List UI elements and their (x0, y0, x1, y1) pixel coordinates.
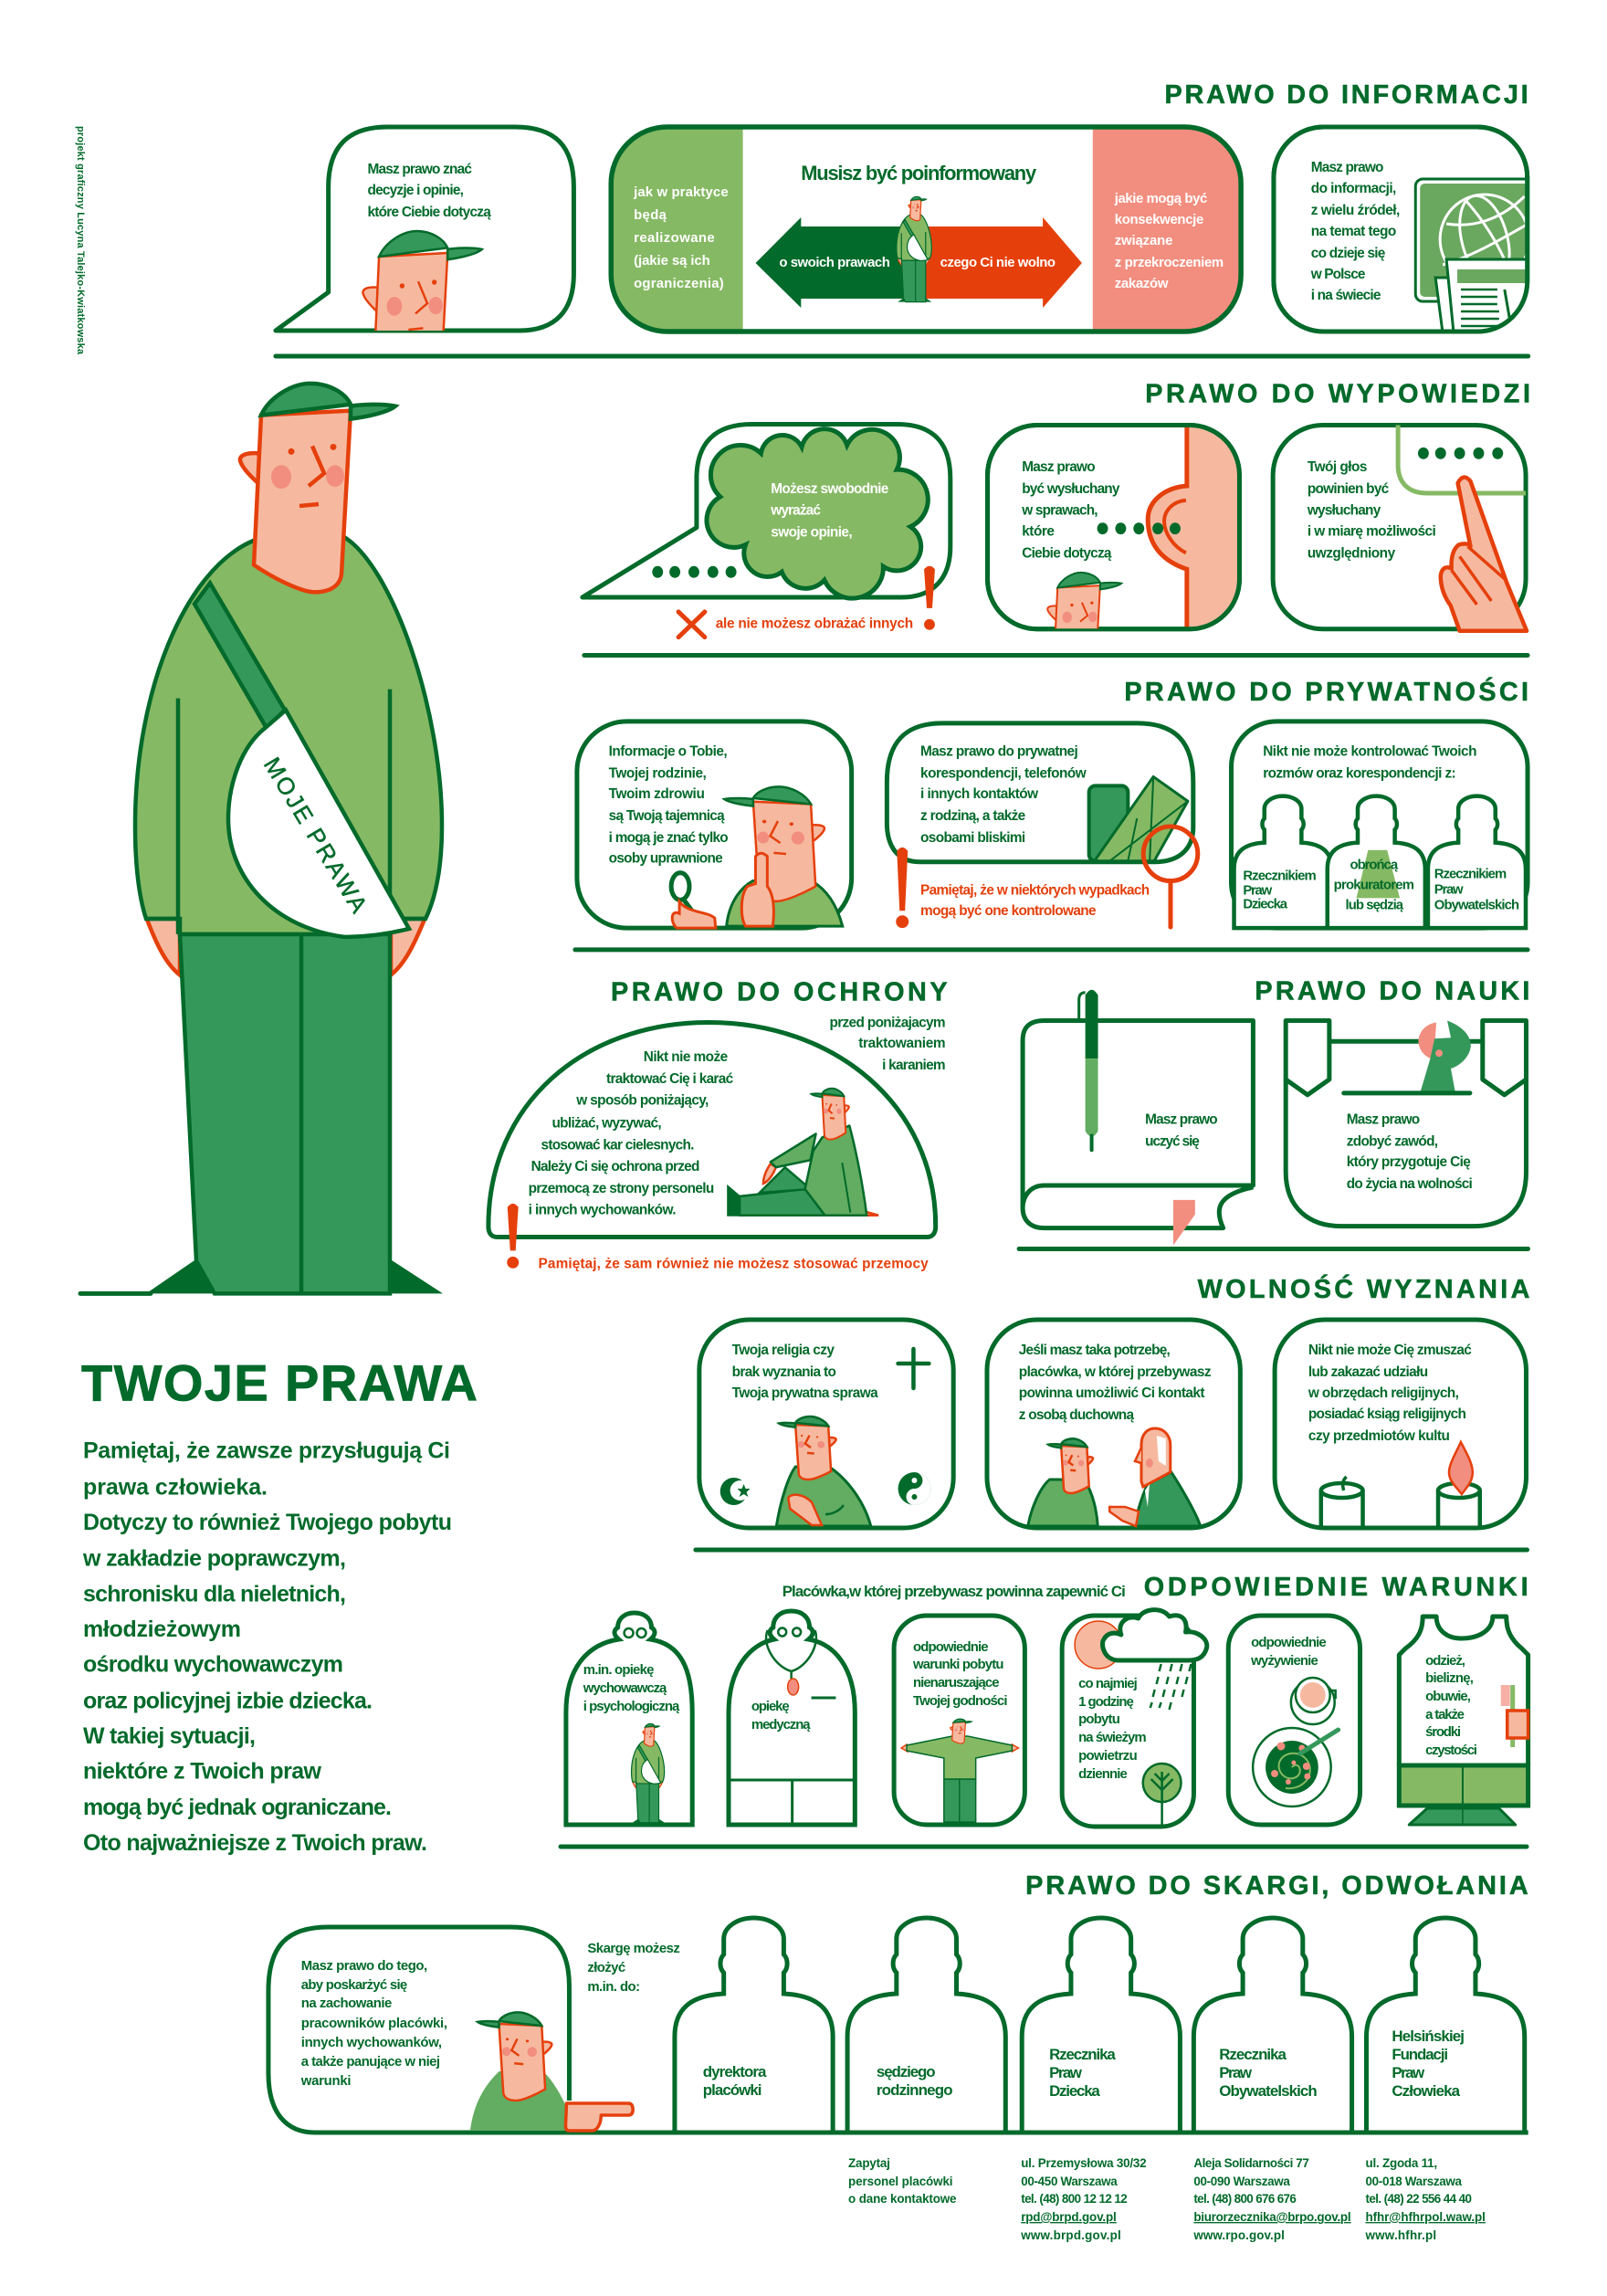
heading: ODPOWIEDNIE WARUNKI (1144, 1573, 1528, 1602)
panel: musisz być poinformowany: jak w praktyce (633, 184, 729, 200)
contact: HFPC (1365, 2156, 1486, 2242)
intro paragraph: prawa człowieka. (83, 1474, 268, 1500)
icon: cloud (1103, 1610, 1207, 1660)
panel: musisz być poinformowany: jakie mogą być (1114, 191, 1207, 206)
panel: korespondencja (887, 723, 1198, 928)
panel: musisz być poinformowany: związane (1115, 233, 1172, 248)
icon: tree (1143, 1764, 1182, 1825)
sections: ochrona i nauka (488, 977, 1529, 1271)
panel: wyżywienie: odpowiednie (1251, 1635, 1327, 1650)
panel: warunki pobytu: Twojej godności (913, 1693, 1007, 1709)
panel: ear: w sprawach, (1021, 503, 1098, 519)
bag label: MOJE PRAWA (258, 753, 372, 918)
contact: personel: Zapytaj (848, 2156, 890, 2170)
panel: korespondencja: korespondencji, telefonów (920, 765, 1087, 781)
panel: odzież (tank top): czystości (1425, 1743, 1477, 1758)
panel: obrzędy religijne (1275, 1320, 1526, 1528)
warning: korespondencja: Pamiętaj, że w niektórych wypadkach (920, 882, 1150, 898)
panel: twoja tajemnica: osoby uprawnione (609, 851, 723, 867)
text: skargę możesz złożyć: Skargę możesz (587, 1941, 680, 1956)
panel: dome: przemocą ze strony personelu (529, 1181, 714, 1196)
panel: do informacji z wielu źródeł: w Polsce (1310, 267, 1366, 282)
panel: obrzędy religijne: posiadać ksiąg religijnych (1308, 1406, 1466, 1422)
contact: RPD (1020, 2156, 1147, 2242)
icon: cross (898, 1349, 929, 1388)
contact: RPO: biurorzecznika@brpo.gov.pl (1193, 2210, 1351, 2224)
icon: envelope (1095, 776, 1188, 861)
icon: pen (1079, 990, 1098, 1150)
icon: yin yang (898, 1472, 930, 1505)
panel: odzież (tank top): środki (1425, 1724, 1461, 1740)
panel: musisz być poinformowany: konsekwencje (1115, 212, 1203, 227)
intro paragraph: schronisku dla nieletnich, (83, 1581, 346, 1606)
panel: nikt nie może kontrolować: Obywatelskich (1434, 898, 1519, 912)
icon: thought cloud (707, 429, 928, 598)
panel: musisz być poinformowany (611, 127, 1241, 332)
panel: nikt nie może kontrolować: Praw (1434, 882, 1464, 897)
icon: book (1023, 990, 1253, 1245)
bust: rzecznik praw obywatelskich (1193, 1918, 1352, 2133)
panel: dome: Należy Ci się ochrona przed (531, 1159, 699, 1174)
panel: prawo do skargi: aby poskarżyć się (301, 1977, 407, 1993)
panel: dome (488, 1022, 936, 1238)
panel: świeże powietrze: 1 godzinę (1078, 1694, 1134, 1710)
panel: musisz być poinformowany: z przekroczeniem (1115, 255, 1224, 270)
contact: personel: personel placówki (848, 2175, 953, 2188)
panel: dome: traktować Cię i karać (606, 1071, 734, 1087)
intro paragraph: w zakładzie poprawczym, (82, 1546, 346, 1572)
panel: nikt nie może kontrolować: lub sędzią (1346, 898, 1404, 912)
arrow: czego Ci nie wolno (921, 217, 1082, 308)
contact: RPD: www.brpd.gov.pl (1020, 2228, 1121, 2242)
figure: man with finger to lips (724, 786, 843, 926)
text: przed poniżającym traktowaniem: i karaniem (882, 1058, 946, 1073)
panel: speech bubble: decyzje i opinie, (367, 183, 464, 198)
panel: musisz być poinformowany: czego Ci nie wolno (940, 255, 1056, 270)
icon: machine (1344, 1020, 1471, 1093)
bust: sędzia rodzinny (847, 1918, 1005, 2133)
panel: speech bubble (273, 124, 576, 332)
bust: rzecznik praw dziecka: Rzecznika (1049, 2046, 1116, 2063)
figure: man with arms out (901, 1719, 1018, 1822)
intro paragraph: ośrodku wychowawczym (83, 1652, 343, 1678)
icon: toothbrush in hand (1501, 1685, 1528, 1747)
panel: osoba duchowna: placówka, w której przebywasz (1019, 1364, 1212, 1380)
panel: nikt nie może kontrolować: Rzecznikiem (1243, 869, 1317, 884)
sections: wypowiedź i prywatność (575, 380, 1531, 950)
panel: opieka medyczna: medyczną (751, 1717, 811, 1733)
panel: dome: i innych wychowanków. (529, 1203, 677, 1218)
panel: opieka wychowawcza: i psychologiczną (583, 1699, 680, 1714)
bust: helsińska fundacja (1367, 1918, 1525, 2133)
icon: stethoscope (766, 1627, 816, 1695)
panel: twoja tajemnica: są Twoją tajemnicą (609, 808, 725, 824)
text: przed poniżającym traktowaniem (829, 1015, 946, 1073)
panel: nikt nie może kontrolować: Dziecka (1243, 897, 1288, 911)
icon: pointing hand (1441, 478, 1527, 631)
figure: pointing man (470, 2012, 633, 2131)
divider above prawo do skargi (561, 1845, 1527, 1848)
panel: speech bubble with cloud: Możesz swobodnie (771, 481, 889, 497)
panel: speech bubble with cloud: wyrażać (770, 503, 821, 519)
panel: obrzędy religijne: czy przedmiotów kultu (1308, 1428, 1450, 1444)
text: skargę możesz złożyć: m.in. do: (587, 1979, 640, 1995)
panel: do informacji z wielu źródeł: do informacji, (1311, 181, 1396, 196)
intro paragraph: młodzieżowym (83, 1617, 241, 1642)
contact: personel (848, 2156, 957, 2206)
panel: religia: Twoja religia czy (732, 1343, 835, 1358)
icon: candle lit (1438, 1442, 1480, 1527)
panel: hand raised: Twój głos (1308, 459, 1367, 475)
panel: do informacji z wielu źródeł: z wielu źródeł, (1311, 203, 1400, 218)
panel: nikt nie może kontrolować: obrońcą (1350, 858, 1399, 873)
panel: odzież (tank top): odzież, (1425, 1653, 1465, 1669)
panel: osoba duchowna: z osobą duchowną (1019, 1407, 1134, 1423)
panel: prawo do skargi: na zachowanie (301, 1996, 392, 2011)
panel: nikt nie może kontrolować: rozmów oraz korespondencji z: (1263, 765, 1456, 781)
warning: korespondencja: mogą być one kontrolowane (920, 903, 1097, 919)
panel: ear: być wysłuchany (1022, 481, 1120, 497)
panel: twoja tajemnica: Informacje o Tobie, (609, 744, 728, 760)
panel: odzież (tank top): bieliznę, (1425, 1670, 1474, 1686)
panel: prawo do skargi: warunki (300, 2073, 352, 2089)
panel: ear: Masz prawo (1022, 459, 1096, 475)
panel: twoja tajemnica: Twoim zdrowiu (609, 786, 705, 802)
heading: WOLNOŚĆ WYZNANIA (1198, 1273, 1530, 1304)
panel: warunki pobytu: odpowiednie (913, 1639, 989, 1655)
panel: nikt nie może kontrolować: Rzecznikiem (1434, 868, 1507, 882)
panel: nikt nie może kontrolować: prokuratorem (1334, 878, 1414, 892)
bust: dyrektor placówki: placówki (703, 2081, 761, 2099)
panel: warunki pobytu: nienaruszające (913, 1675, 1000, 1690)
warning: ale nie możesz obrażać innych: ale nie możesz obrażać innych (716, 616, 913, 632)
panel: wyżywienie (1228, 1616, 1360, 1825)
panel: do informacji z wielu źródeł: na temat tego (1311, 224, 1396, 239)
intro paragraph (82, 1438, 452, 1856)
text: skargę możesz złożyć: złożyć (587, 1960, 625, 1975)
contact: RPD: 00-450 Warszawa (1021, 2175, 1118, 2188)
panel: ear: które (1022, 524, 1055, 540)
credit: vertical text: projekt graficzny Lucyna Talejko-Kwiatkowska (75, 126, 86, 355)
contact: HFPC: hfhr@hfhrpol.waw.pl (1366, 2210, 1486, 2224)
panel: hand raised (1273, 426, 1531, 631)
icon: globe and newspaper (1413, 177, 1525, 329)
panel: zdobyć zawód (1286, 1020, 1526, 1227)
panel: warunki pobytu: warunki pobytu (912, 1657, 1003, 1672)
panel: prawo do skargi (268, 1927, 1528, 2133)
panel: hand raised: wysłuchany (1307, 503, 1381, 519)
icon: cup (1291, 1678, 1336, 1724)
contact: RPO: tel. (48) 800 676 676 (1193, 2192, 1297, 2206)
panel: osoba duchowna: powinna umożliwić Ci kontakt (1019, 1385, 1205, 1401)
panel: świeże powietrze: co najmiej (1078, 1676, 1138, 1691)
panel: dome: stosować kar cielesnych. (541, 1137, 694, 1153)
intro paragraph: Oto najważniejsze z Twoich praw. (83, 1830, 427, 1856)
panel: speech bubble: które Ciebie dotyczą (367, 205, 491, 220)
bust: helsińska fundacja: Praw (1392, 2064, 1425, 2081)
panel: warunki pobytu (894, 1616, 1024, 1825)
contact: RPO: Aleja Solidarności 77 (1193, 2156, 1309, 2170)
section: wolność wyznania (696, 1273, 1530, 1550)
heading: prawo do wypowiedzi: PRAWO DO WYPOWIEDZI (1145, 380, 1530, 409)
contact: RPD: ul. Przemysłowa 30/32 (1021, 2156, 1147, 2170)
panel: świeże powietrze: na świeżym (1078, 1730, 1147, 1745)
icon: crescent (720, 1478, 751, 1505)
section: prawo do skargi, odwołania (268, 1871, 1528, 2242)
panel: twoja tajemnica: Twojej rodzinie, (609, 765, 707, 781)
panel: prawo do skargi: Masz prawo do tego, (301, 1958, 427, 1974)
bust: helsińska fundacja: Fundacji (1392, 2046, 1448, 2063)
intro paragraph: Pamiętaj, że zawsze przysługują Ci (83, 1438, 450, 1464)
icon: bookmark (1173, 1200, 1195, 1245)
panel: opieka medyczna (729, 1611, 855, 1825)
contact: RPO: www.rpo.gov.pl (1192, 2228, 1285, 2242)
panel: świeże powietrze: dziennie (1078, 1766, 1128, 1782)
panel: musisz być poinformowany: Musisz być poinformowany (801, 162, 1037, 184)
panel: dome: ubliżać, wyzywać, (551, 1116, 662, 1132)
figure: man with hand on chest (776, 1417, 871, 1526)
panel: obrzędy religijne: lub zakazać udziału (1308, 1364, 1428, 1380)
panel: odzież (tank top): obuwie, (1425, 1689, 1471, 1704)
heading: prawo do nauki: PRAWO DO NAUKI (1255, 977, 1529, 1006)
panel: musisz być poinformowany: ograniczenia) (634, 276, 724, 291)
warning: sam nie stosuj przemocy (507, 1204, 929, 1271)
panel: ear (985, 423, 1242, 632)
panel: opieka wychowawcza: m.in. opiekę (583, 1662, 654, 1678)
contact: HFPC: ul. Zgoda 11, (1366, 2156, 1437, 2170)
icon: three busts (1234, 796, 1526, 928)
intro sentence: Placówka,w której przebywasz powinna zapewnić Ci (782, 1583, 1126, 1600)
panel: zdobyć zawód: Masz prawo (1347, 1112, 1420, 1128)
section: odpowiednie warunki (566, 1573, 1528, 1827)
heading: PRAWO DO SKARGI, ODWOŁANIA (1025, 1871, 1528, 1901)
bust: dyrektor placówki (675, 1918, 833, 2133)
panel: odzież (tank top) (1399, 1617, 1528, 1825)
panel: zdobyć zawód: zdobyć zawód, (1347, 1133, 1438, 1149)
bust: rzecznik praw obywatelskich: Rzecznika (1219, 2046, 1287, 2063)
warning: ale nie możesz obrażać innych (678, 566, 935, 637)
warning: korespondencja (896, 848, 1150, 928)
panel: do informacji z wielu źródeł: i na świecie (1311, 288, 1381, 303)
contact: RPD: tel. (48) 800 12 12 12 (1021, 2192, 1128, 2206)
panel: hand raised: i w miarę możliwości (1308, 524, 1436, 540)
icon: rain (1150, 1664, 1191, 1710)
icon: key in hand (671, 873, 716, 928)
panel: obrzędy religijne: Nikt nie może Cię zmuszać (1308, 1343, 1472, 1358)
panel: speech bubble: Masz prawo znać (367, 162, 472, 177)
panel: twoja tajemnica: i mogą je znać tylko (609, 830, 729, 846)
panel: świeże powietrze: powietrzu (1078, 1748, 1138, 1764)
panel: obrzędy religijne: w obrzędach religijnych, (1308, 1385, 1459, 1401)
contact: RPO: 00-090 Warszawa (1193, 2175, 1290, 2188)
panel: ear: Ciebie dotyczą (1022, 545, 1112, 561)
heading: prawo do ochrony: PRAWO DO OCHRONY (611, 978, 948, 1007)
bust: rzecznik praw dziecka: Dziecka (1049, 2082, 1100, 2100)
panel: korespondencja: osobami bliskimi (920, 830, 1025, 846)
panel: korespondencja: Masz prawo do prywatnej (920, 744, 1078, 760)
bust: rzecznik praw obywatelskich: Praw (1219, 2064, 1253, 2081)
intro paragraph: W takiej sytuacji, (83, 1723, 256, 1749)
bust: rzecznik praw dziecka: Praw (1049, 2064, 1083, 2081)
intro paragraph: mogą być jednak ograniczane. (83, 1795, 392, 1820)
panel: osoba duchowna: Jeśli masz taka potrzebę, (1019, 1343, 1171, 1358)
panel: nikt nie może kontrolować: Praw (1243, 883, 1273, 898)
main title and intro (81, 1355, 478, 1856)
icon: sun (1075, 1621, 1122, 1669)
panel: zdobyć zawód: do życia na wolności (1347, 1176, 1473, 1192)
heading: PRAWO DO INFORMACJI (1165, 80, 1528, 110)
panel: twoja tajemnica (577, 721, 852, 928)
panel: opieka wychowawcza (566, 1613, 692, 1825)
figure: boy (1028, 1438, 1098, 1526)
figure: sitting man (728, 1089, 878, 1216)
icon: candle unlit (1321, 1477, 1363, 1527)
bust: sędzia rodzinny: sędziego (877, 2063, 936, 2080)
panel: zdobyć zawód: który przygotuje Cię (1347, 1154, 1471, 1170)
panel: korespondencja: z rodziną, a także (920, 808, 1026, 824)
intro paragraph: oraz policyjnej izbie dziecka. (83, 1688, 373, 1713)
contact: personel: o dane kontaktowe (848, 2192, 957, 2206)
section: prawo do informacji (273, 84, 1530, 358)
panel: wyżywienie: wyżywienie (1250, 1653, 1318, 1669)
panel: musisz być poinformowany: będą (634, 207, 667, 223)
intro paragraph: Dotyczy to również Twojego pobytu (83, 1510, 452, 1535)
panel: musisz być poinformowany: realizowane (634, 230, 715, 246)
warning: sam nie stosuj przemocy: Pamiętaj, że sam również nie możesz stosować przemocy (539, 1256, 929, 1271)
heading: prawo do prywatności: PRAWO DO PRYWATNOŚCI (1124, 676, 1528, 707)
panel: opieka medyczna: opiekę (751, 1699, 790, 1714)
panel: musisz być poinformowany: o swoich prawach (779, 255, 890, 270)
text: skargę możesz złożyć (587, 1941, 680, 1995)
panel: prawo do skargi: a także panujące w niej (301, 2054, 440, 2070)
panel: speech bubble with cloud (583, 425, 951, 598)
panel: prawo do skargi: pracowników placówki, (301, 2016, 447, 2031)
panel: musisz być poinformowany: (jakie są ich (634, 253, 710, 269)
panel: musisz być poinformowany: zakazów (1115, 276, 1169, 291)
panel: speech bubble with cloud: swoje opinie, (771, 525, 853, 541)
figure: priest (1109, 1428, 1201, 1526)
icon: book: Masz prawo (1145, 1112, 1218, 1128)
bust: sędzia rodzinny: rodzinnego (877, 2081, 953, 2099)
icon: book: uczyć się (1145, 1133, 1200, 1149)
icon: soup plate (1253, 1728, 1339, 1806)
panel: nikt nie może kontrolować (1231, 721, 1528, 928)
panel: świeże powietrze: pobytu (1078, 1711, 1120, 1727)
main title: TWOJE PRAWA (81, 1355, 478, 1411)
main figure: man with bag (80, 384, 443, 1293)
panel: nikt nie może kontrolować: Nikt nie może kontrolować Twoich (1263, 744, 1476, 760)
icon: magnifier (1143, 827, 1198, 927)
bust: helsińska fundacja: Helsińskiej (1392, 2027, 1465, 2045)
panel: hand raised: powinien być (1308, 481, 1390, 497)
contact: HFPC: 00-018 Warszawa (1366, 2175, 1463, 2188)
panel: do informacji z wielu źródeł: Masz prawo (1311, 160, 1383, 175)
panel: dome: w sposób poniżający, (575, 1093, 709, 1109)
bust: dyrektor placówki: dyrektora (703, 2063, 767, 2080)
contact: RPD: rpd@brpd.gov.pl (1021, 2210, 1117, 2224)
panel: religia (699, 1320, 953, 1528)
panel: do informacji z wielu źródeł (1274, 127, 1548, 333)
panel: osoba duchowna (987, 1320, 1240, 1528)
bust: rzecznik praw dziecka (1022, 1918, 1180, 2133)
panel: hand raised: uwzględniony (1308, 545, 1396, 561)
panel: religia: Twoja prywatna sprawa (732, 1385, 878, 1401)
panel: korespondencja: i innych kontaktów (920, 786, 1038, 802)
panel: religia: brak wyznania to (732, 1364, 836, 1380)
arrow: o swoich prawach (756, 217, 906, 308)
intro paragraph: niektóre z Twoich praw (83, 1759, 322, 1785)
bust: helsińska fundacja: Człowieka (1392, 2082, 1461, 2100)
text: przed poniżającym traktowaniem: przed poniżajacym (829, 1015, 946, 1030)
text: przed poniżającym traktowaniem: traktowaniem (858, 1036, 946, 1051)
contact: RPO (1192, 2156, 1351, 2242)
panel: dome: Nikt nie może (644, 1049, 729, 1065)
contact: HFPC: www.hfhr.pl (1365, 2228, 1436, 2242)
bust: rzecznik praw obywatelskich: Obywatelskich (1219, 2082, 1318, 2100)
icon: phone (1089, 785, 1128, 861)
panel: prawo do skargi: innych wychowanków, (301, 2035, 442, 2050)
contact: HFPC: tel. (48) 22 556 44 40 (1366, 2192, 1472, 2206)
panel: odzież (tank top): a także (1425, 1707, 1465, 1722)
panel: świeże powietrze (1062, 1610, 1207, 1827)
panel: opieka wychowawcza: wychowawczą (583, 1680, 667, 1696)
panel: do informacji z wielu źródeł: co dzieje się (1311, 246, 1386, 261)
